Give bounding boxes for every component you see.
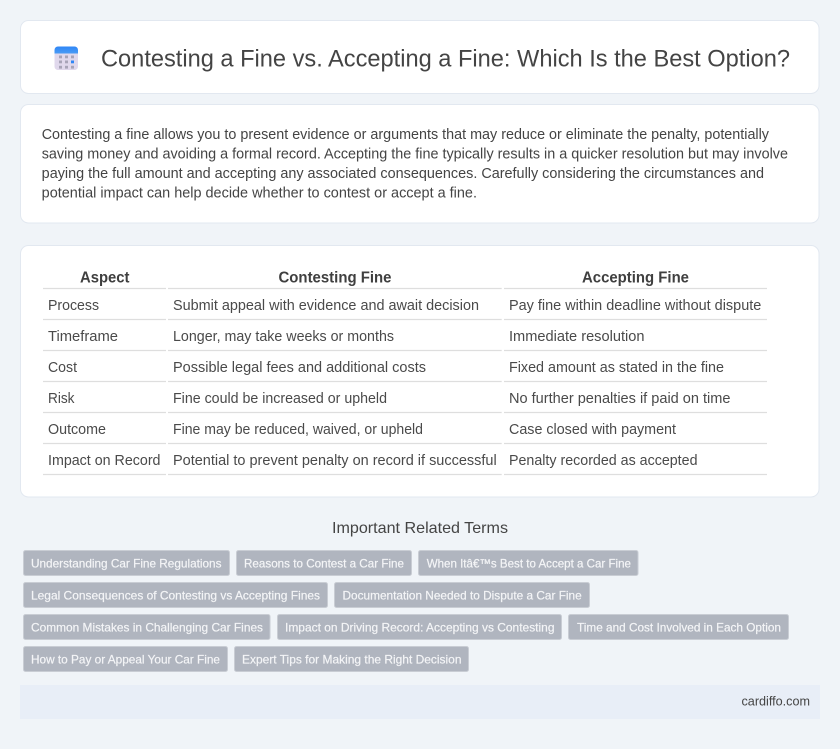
row: timeframe: Immediate resolution — [509, 329, 644, 345]
row: cost: Possible legal fees and additional costs — [173, 360, 426, 376]
tag: How to Pay or Appeal Your Car Fine — [31, 652, 220, 666]
row: process — [48, 298, 761, 314]
tag — [568, 614, 788, 640]
row: outcome: Outcome — [48, 422, 106, 438]
footer — [20, 685, 820, 719]
tag: Expert Tips for Making the Right Decision — [242, 652, 462, 666]
tag — [236, 550, 412, 576]
row: cost: Cost — [48, 360, 77, 376]
row: risk: Risk — [48, 391, 75, 407]
tag: Impact on Driving Record: Accepting vs Contesting — [285, 620, 554, 634]
row: timeframe: Timeframe — [48, 329, 118, 345]
row: outcome: Fine may be reduced, waived, or upheld — [173, 422, 423, 438]
tag: Legal Consequences of Contesting vs Accepting Fines — [31, 588, 320, 602]
row: impact on record — [48, 453, 698, 469]
tag — [234, 646, 468, 672]
tag — [278, 614, 562, 640]
row: impact on record: Potential to prevent penalty on record if successful — [173, 453, 497, 469]
panel: title header — [20, 20, 819, 94]
tag — [334, 582, 590, 608]
text block: introduction paragraph: Contesting a fine allows you to present evidence or arguments that may reduce or eliminate the penalty, potentially — [42, 127, 770, 143]
row: outcome: Case closed with payment — [509, 422, 676, 438]
tag: Documentation Needed to Dispute a Car Fine — [342, 588, 582, 602]
row: process: Pay fine within deadline without dispute — [509, 298, 761, 314]
row: cost — [48, 360, 724, 376]
heading: important related terms: Important Related Terms — [332, 520, 508, 537]
row: risk: Fine could be increased or upheld — [173, 391, 387, 407]
tag — [24, 550, 230, 576]
table header row — [80, 270, 689, 287]
row: timeframe: Longer, may take weeks or months — [173, 329, 394, 345]
text block: introduction paragraph: potential impact can help decide whether to contest or accept a fine. — [42, 185, 477, 201]
tag list: related terms — [24, 550, 788, 672]
row: risk: No further penalties if paid on time — [509, 391, 730, 407]
panel: introduction — [20, 104, 819, 223]
text block: introduction paragraph: saving money and avoiding a formal record. Accepting the fine typically results in a quicker resolution but may involve — [42, 146, 788, 162]
tag — [418, 550, 638, 576]
tag — [24, 646, 228, 672]
row: process: Submit appeal with evidence and await decision — [173, 298, 479, 314]
table header row: Contesting Fine — [278, 270, 392, 287]
tag: Reasons to Contest a Car Fine — [244, 556, 404, 570]
row: cost: Fixed amount as stated in the fine — [509, 360, 724, 376]
text block: introduction paragraph: paying the full amount and accepting any associated consequences. Carefully considering the circumstances and — [42, 166, 764, 182]
text block: introduction paragraph — [42, 127, 788, 201]
footer: cardiffo.com — [742, 694, 810, 709]
row: timeframe — [48, 329, 644, 345]
row: process: Process — [48, 298, 99, 314]
row: impact on record: Impact on Record — [48, 453, 160, 469]
table header row: Accepting Fine — [582, 270, 689, 287]
table header row: Aspect — [80, 270, 130, 287]
tag: Common Mistakes in Challenging Car Fines — [31, 620, 263, 634]
tag — [24, 614, 270, 640]
icon: calendar — [54, 46, 78, 70]
panel: comparison table — [20, 246, 819, 497]
tag: Time and Cost Involved in Each Option — [577, 620, 781, 634]
row: outcome — [48, 422, 676, 438]
title: Contesting a Fine vs. Accepting a Fine: Which Is the Best Option? — [101, 46, 790, 73]
tag: Understanding Car Fine Regulations — [31, 556, 222, 570]
tag: When Itâ€™s Best to Accept a Car Fine — [427, 556, 631, 570]
tag — [24, 582, 328, 608]
row: impact on record: Penalty recorded as accepted — [509, 453, 698, 469]
row: risk — [48, 391, 730, 407]
